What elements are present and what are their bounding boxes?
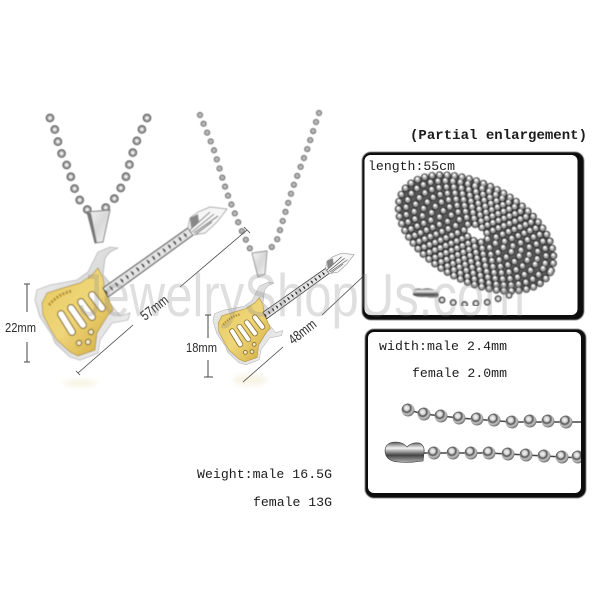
necklace: small pendant chain — [200, 113, 319, 253]
lower bead chain with clasp — [385, 442, 584, 464]
dimension: 18mm height — [186, 315, 217, 377]
label: width male: width:male 2.4mm — [379, 339, 507, 354]
weight: female: female 13G — [253, 495, 332, 510]
panel: chain width — [365, 329, 586, 498]
panel: chain length — [362, 150, 584, 320]
upper bead chain — [402, 404, 581, 428]
coiled bead chain — [379, 150, 573, 315]
dimension: 22mm height — [5, 284, 36, 362]
bail: large pendant — [87, 210, 110, 243]
dimension: 22mm height: 22mm — [5, 320, 36, 335]
dimension: 57mm length — [76, 227, 250, 375]
dimension: 48mm length: 48mm — [285, 316, 319, 347]
label: width female: female 2.0mm — [412, 366, 507, 381]
dimension: 18mm height: 18mm — [186, 340, 217, 355]
pendant reflections — [63, 374, 267, 387]
bail: small pendant — [252, 251, 267, 277]
chain tail and clasp — [413, 288, 520, 305]
necklace: large pendant chain — [50, 118, 147, 212]
pendant: large guitar — [35, 207, 227, 360]
pendant: small guitar — [213, 253, 354, 365]
weight: male: Weight:male 16.5G — [197, 467, 332, 482]
dimension: 48mm length — [243, 267, 373, 382]
dimension: 57mm length: 57mm — [137, 292, 171, 323]
heading: partial enlargement: (Partial enlargement) — [410, 128, 587, 144]
label: length: length:55cm — [368, 159, 455, 174]
